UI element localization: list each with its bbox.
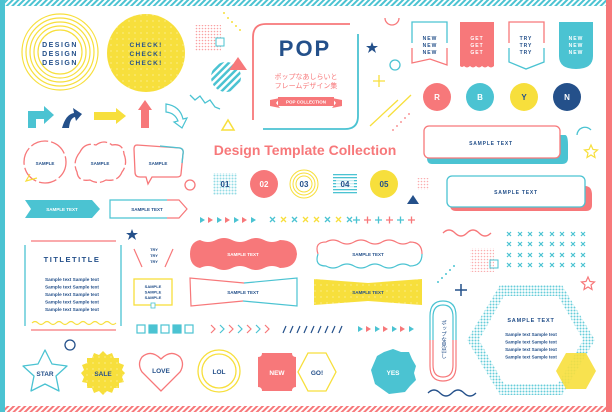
- ribbon: NEW teal: NEW: [569, 43, 583, 49]
- decor: striped circle and triangle: [211, 57, 247, 92]
- bowtie outline frame: SAMPLE TEXT: [227, 290, 259, 295]
- navy circle: [65, 340, 75, 350]
- dotted hexagon text frame: SAMPLE TEXT: [507, 318, 555, 324]
- arrows row: [28, 100, 187, 128]
- bubble: circle: [24, 141, 66, 183]
- border: bottom stripes: [0, 406, 612, 412]
- TRY small: TRY: [150, 247, 158, 252]
- concentric circles DESIGN: DESIGN: [42, 42, 78, 49]
- RBYN circles: N: [564, 93, 570, 102]
- decor: pink dot grid: [195, 25, 224, 51]
- border: top stripes: [0, 0, 612, 6]
- top-middle decor: [366, 18, 411, 131]
- ribbon: POP COLLECTION: [286, 100, 326, 104]
- title box: Sample text Sample text: [45, 300, 99, 304]
- arrow: yellow: [94, 108, 126, 124]
- TRY small: TRY: [150, 253, 158, 258]
- pink wavy blob: [190, 238, 297, 270]
- yellow box SAMPLE: SAMPLE: [145, 295, 162, 300]
- triangles row 2: [358, 326, 414, 332]
- yellow bowtie: [314, 279, 422, 305]
- badge: sale: SALE: [94, 371, 112, 378]
- arrow: pink up: [138, 100, 152, 128]
- yellow box SAMPLE: SAMPLE: [145, 290, 162, 294]
- yellow box SAMPLE: [134, 279, 172, 308]
- triangles / crosses / plus row: [200, 216, 415, 224]
- num 04: 04: [341, 180, 350, 189]
- decor: yellow dots diagonal: [223, 12, 241, 31]
- right-bottom decor: [437, 230, 594, 296]
- POP frame: ポップなあしらいと: [274, 73, 338, 81]
- badge: GO hex: [298, 353, 336, 391]
- arrow: teal bent: [28, 106, 54, 128]
- title box: TITLETITLE: [44, 255, 100, 264]
- wavy outline SAMPLE TEXT: [317, 240, 422, 268]
- ribbon: NEW outline: NEW: [423, 36, 437, 42]
- bubble: rectangle: [134, 145, 183, 184]
- bowtie outline frame: [190, 278, 297, 306]
- num 04: [333, 174, 357, 194]
- badge: sale: [81, 351, 125, 395]
- badge: heart: [140, 353, 182, 391]
- pink wavy blob: SAMPLE TEXT: [227, 252, 259, 257]
- squares row: [137, 325, 193, 333]
- ribbon: NEW teal: [559, 22, 593, 69]
- ribbon: GET: GET: [470, 36, 484, 42]
- pill heading vertical: ポップな見出し: [440, 320, 447, 359]
- decor: teal zigzag: [190, 95, 220, 109]
- ribbon: NEW outline: NEW: [423, 43, 437, 49]
- banner: outline: [110, 200, 187, 218]
- numbers row: [213, 170, 398, 198]
- POP frame: POP: [279, 36, 331, 61]
- num 02: 02: [260, 180, 269, 189]
- RBYN circles: B: [477, 93, 483, 102]
- arrow: teal outline curved: [166, 104, 187, 128]
- decor: pink circle: [185, 180, 195, 190]
- yellow circle CHECK: CHECK!: [129, 42, 163, 49]
- ribbon: NEW teal: NEW: [569, 36, 583, 42]
- title box: Sample text Sample text: [45, 292, 99, 297]
- RBYN circles: [423, 83, 581, 111]
- ribbon: GET: GET: [470, 43, 484, 49]
- ribbon: TRY: [509, 22, 544, 69]
- badge: YES: YES: [386, 370, 400, 377]
- badge: LOL: [198, 350, 240, 392]
- ribbon: GET: GET: [470, 50, 484, 56]
- dotted hexagon text frame: Sample text Sample text: [505, 347, 557, 352]
- decor: pink dots & navy triangle: [407, 178, 429, 204]
- ribbon: TRY: TRY: [520, 36, 532, 42]
- badge: NEW: [258, 353, 296, 391]
- badge: star: [23, 350, 67, 391]
- ribbon: TRY: TRY: [520, 50, 532, 56]
- badge: LOL: LOL: [212, 369, 226, 376]
- yellow circle CHECK: CHECK!: [129, 60, 163, 67]
- num 03: 03: [300, 180, 309, 189]
- border: right bar: [606, 0, 612, 412]
- ribbon: NEW outline: [412, 22, 447, 65]
- ribbon: NEW outline: NEW: [423, 50, 437, 56]
- concentric circles DESIGN: [22, 14, 98, 90]
- POP frame: フレームデザイン集: [275, 81, 337, 90]
- num 02: [250, 170, 278, 198]
- num 05: [370, 170, 398, 198]
- speech bubbles: [24, 141, 183, 184]
- yellow bowtie: SAMPLE TEXT: [352, 290, 384, 295]
- RBYN circles: R: [434, 93, 440, 102]
- num 05: 05: [380, 180, 389, 189]
- yellow circle CHECK: CHECK!: [129, 51, 163, 58]
- num 01: [213, 173, 237, 195]
- pill heading vertical: [430, 301, 456, 381]
- bubble: cloud: [75, 142, 126, 182]
- num 01: 01: [221, 180, 230, 189]
- ribbon: TRY: TRY: [520, 43, 532, 49]
- banner: outline: SAMPLE TEXT: [131, 207, 163, 212]
- decor: arc & star: [577, 127, 598, 158]
- sample box 2: [447, 176, 592, 211]
- border: left bar: [0, 0, 5, 412]
- dotted hexagon text frame: Sample text Sample text: [505, 340, 557, 344]
- heading: Design Template Collection: Design Template Collection: [214, 142, 396, 158]
- num 03: [290, 170, 318, 198]
- arrow: navy curved: [62, 108, 82, 128]
- title box: Sample text Sample text: [45, 307, 99, 312]
- title box: Sample text Sample text: [45, 277, 99, 282]
- badge: YES: [371, 349, 416, 394]
- bubble: rectangle: SAMPLE: [149, 161, 167, 166]
- yellow box SAMPLE: SAMPLE: [145, 284, 162, 289]
- badge: GO hex: GO!: [311, 370, 323, 377]
- decor: yellow triangle: [222, 120, 234, 130]
- bubble: circle: SAMPLE: [36, 161, 54, 166]
- badge: NEW: NEW: [269, 370, 285, 377]
- navy wave: [428, 390, 476, 396]
- TRY small: [134, 247, 173, 267]
- navy slashes: [283, 326, 342, 333]
- title box: [25, 241, 121, 330]
- wavy outline SAMPLE TEXT: SAMPLE TEXT: [352, 252, 384, 257]
- navy star: [126, 229, 138, 240]
- ribbon: NEW teal: NEW: [569, 50, 583, 56]
- TRY small: TRY: [150, 259, 158, 264]
- dotted hexagon text frame: Sample text Sample text: [505, 332, 557, 337]
- badge: star: STAR: [36, 371, 54, 378]
- sample box 2: SAMPLE TEXT: [494, 190, 538, 196]
- POP frame: [253, 24, 358, 129]
- sample box 1: SAMPLE TEXT: [469, 141, 513, 147]
- sample box 1: [424, 126, 568, 164]
- bubble: cloud: SAMPLE: [91, 161, 109, 166]
- title box: Sample text Sample text: [45, 284, 99, 290]
- ribbons row: [412, 22, 593, 69]
- badges row: [23, 349, 416, 395]
- banner: teal: [25, 200, 100, 218]
- concentric circles DESIGN: DESIGN: [42, 60, 78, 67]
- badge: heart: LOVE: [152, 368, 171, 375]
- concentric circles DESIGN: DESIGN: [42, 51, 78, 58]
- RBYN circles: Y: [521, 93, 527, 102]
- dotted hexagon text frame: [467, 285, 596, 395]
- dotted hexagon text frame: Sample text Sample text: [505, 354, 557, 360]
- chevrons row: [211, 325, 269, 333]
- banner: teal: SAMPLE TEXT: [46, 207, 78, 212]
- yellow circle CHECK: [107, 14, 185, 92]
- ribbon: GET: [460, 22, 494, 68]
